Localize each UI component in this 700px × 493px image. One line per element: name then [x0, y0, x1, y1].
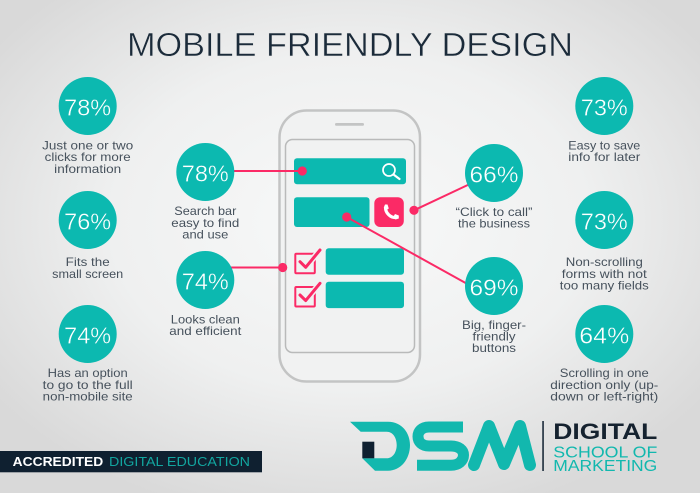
stat: 73% save: info for later [568, 150, 640, 164]
stat: 73% forms: too many fields [560, 278, 649, 292]
stat: 73% save: 73% [581, 94, 628, 120]
stat: 76% small screen: Fits the [66, 255, 110, 269]
stat: 78% search bar [171, 143, 239, 242]
stat: 78% clicks: 78% [64, 94, 111, 120]
logo text: DIGITAL [553, 419, 657, 444]
stat: 74% clean: and efficient [169, 324, 242, 338]
stat: 78% search bar: and use [182, 228, 229, 242]
stat: 66% call: the business [458, 217, 530, 231]
stat: 64% direction: down or left-right) [550, 390, 658, 404]
stat: 73% save: Easy to save [568, 138, 641, 152]
stat: 73% forms [560, 191, 649, 292]
search bar [294, 158, 406, 184]
stat: 74% full site: 74% [64, 322, 111, 348]
stat: 69% buttons [462, 257, 526, 355]
stat: 78% clicks: clicks for more [45, 150, 131, 164]
stat: 74% full site [43, 305, 133, 404]
connector: big buttons [342, 212, 480, 291]
stat: 78% clicks: information [54, 162, 121, 176]
stat: 76% small screen: small screen [52, 267, 123, 281]
logo divider [542, 421, 544, 471]
stat: 76% small screen [52, 191, 123, 281]
stat: 78% clicks [42, 77, 134, 176]
stat: 69% buttons: 69% [470, 274, 518, 300]
stat: 66% call: “Click to call” [456, 205, 533, 219]
connector: search bar [230, 166, 307, 176]
checkbox row 1 [295, 248, 404, 275]
logo: DSM: SCHOOL OF [553, 444, 658, 462]
logo: DSM: MARKETING [553, 458, 657, 475]
stat: 78% search bar: easy to find [171, 216, 239, 230]
stat: 73% forms: Non-scrolling [566, 255, 643, 269]
stat: 64% direction: direction only (up- [550, 378, 658, 392]
stat: 78% search bar: 78% [182, 160, 229, 186]
stat: 64% direction: 64% [579, 322, 629, 348]
phone outline [280, 110, 420, 382]
stat: 74% clean: Looks clean [171, 312, 240, 326]
title: MOBILE FRIENDLY DESIGN [127, 27, 573, 64]
stat: 64% direction: Scrolling in one [560, 366, 649, 380]
stat: 78% clicks: Just one or two [42, 138, 134, 152]
big button [294, 197, 370, 227]
banner: accredited: DIGITAL EDUCATION [109, 454, 250, 469]
banner: accredited: ACCREDITED [13, 454, 103, 469]
stat: 73% save [568, 77, 641, 164]
stat: 66% call [456, 144, 533, 231]
stat: 69% buttons: friendly [472, 330, 516, 344]
stat: 69% buttons: Big, finger- [462, 318, 526, 332]
stat: 74% full site: non-mobile site [43, 390, 133, 404]
stat: 66% call: 66% [470, 162, 518, 188]
checkbox row 2 [295, 282, 404, 308]
stat: 74% full site: to go to the full [43, 378, 133, 392]
stat: 64% direction [550, 305, 658, 404]
stat: 69% buttons: buttons [472, 341, 516, 355]
logo: DSM [350, 419, 658, 475]
stat: 76% small screen: 76% [64, 208, 111, 234]
connector: looks clean [230, 263, 287, 272]
banner: accredited [0, 451, 262, 472]
connector: click to call [409, 183, 472, 215]
icon: call button [374, 197, 404, 227]
stat: 74% clean [169, 251, 242, 338]
stat: 73% forms: 73% [581, 208, 628, 234]
stat: 74% full site: Has an option [48, 366, 128, 380]
stat: 73% forms: forms with not [562, 267, 648, 281]
icon: magnifier [383, 164, 400, 179]
logo mark [350, 422, 530, 471]
stat: 78% search bar: Search bar [174, 204, 236, 218]
stat: 74% clean: 74% [182, 268, 229, 294]
